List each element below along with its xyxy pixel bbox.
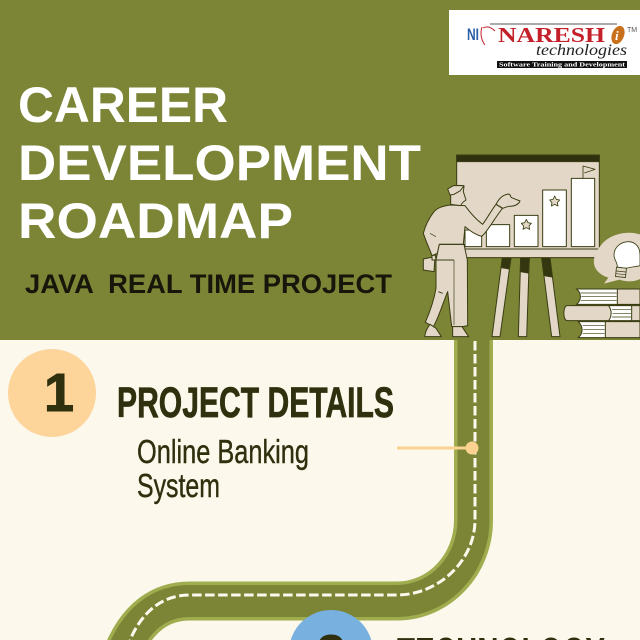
step 1 body text: System	[137, 467, 220, 504]
step 1 badge: 1	[44, 363, 74, 423]
step 1 badge	[8, 349, 96, 437]
person	[423, 185, 520, 337]
board	[457, 155, 599, 250]
logo: NARESH	[498, 23, 605, 47]
step 1 heading: PROJECT DETAILS	[117, 379, 394, 427]
title	[18, 77, 421, 249]
easel legs	[492, 258, 560, 337]
logo: technologies	[536, 42, 627, 59]
title: CAREER	[18, 77, 228, 133]
step 1 body text: Online Banking	[137, 433, 309, 470]
logo: Software Training and Development	[499, 62, 626, 69]
illustration: stack of books	[564, 289, 640, 338]
stars and flag	[521, 166, 595, 229]
logo: TM	[627, 27, 637, 34]
chart bars	[465, 178, 595, 247]
step 1 body text	[137, 433, 309, 504]
road	[124, 340, 475, 640]
logo: NI	[467, 25, 479, 44]
subtitle: JAVA REAL TIME PROJECT	[25, 269, 392, 299]
title: ROADMAP	[18, 193, 293, 249]
illustration: lightbulb speech bubble	[594, 233, 640, 284]
connector: marker on road	[397, 442, 478, 454]
logo: i	[615, 28, 619, 43]
logo	[449, 10, 640, 75]
step 2 badge	[289, 610, 373, 640]
header panel	[0, 0, 640, 340]
illustration: presenter with chart board	[423, 155, 605, 337]
title: DEVELOPMENT	[18, 135, 421, 191]
